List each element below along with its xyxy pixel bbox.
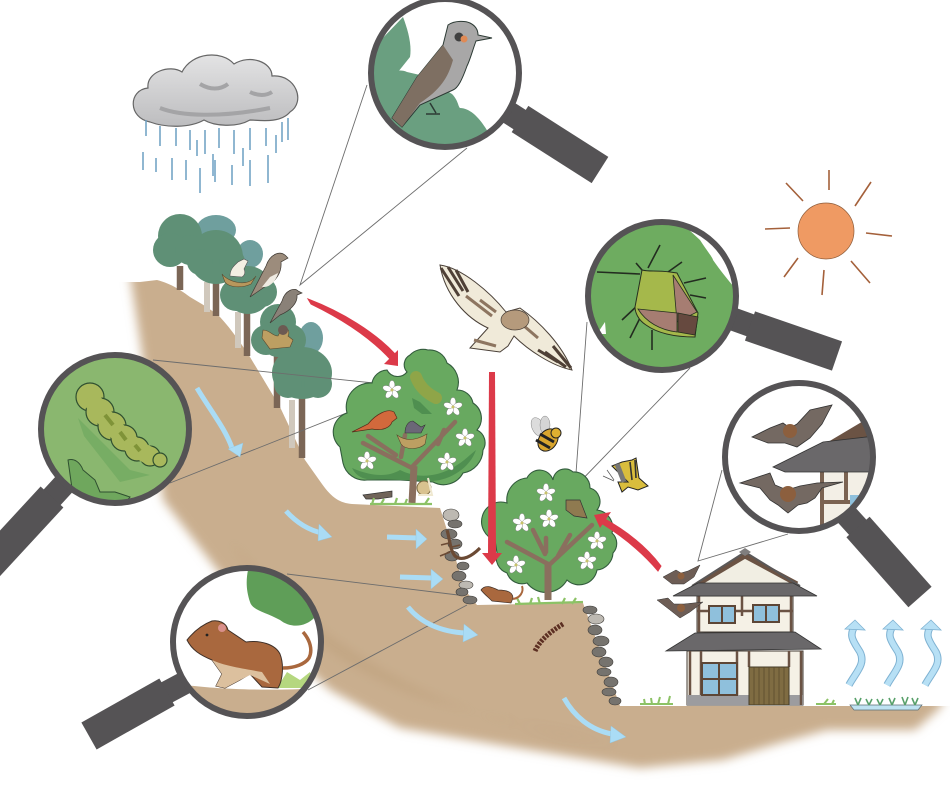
red arrows: [308, 299, 661, 571]
trees on hilltop: [153, 214, 332, 458]
windows: [709, 606, 735, 623]
sun: [765, 170, 892, 295]
magnifier: stink bug: [588, 215, 837, 370]
house with bats: [640, 548, 836, 705]
small animals: lizard, vole, centipede: [440, 530, 563, 651]
magnifier: caterpillar: [0, 355, 189, 575]
magnifier: rodent: [89, 560, 322, 736]
caterpillar on leaf: [416, 377, 436, 398]
magnifier: bird: [370, 0, 600, 170]
stone walls: [441, 509, 621, 705]
magnifier connector lines: [153, 85, 788, 690]
stink bug on tree: [566, 500, 587, 518]
tree with flowers (left): [333, 349, 485, 504]
magnifier: bats: [725, 383, 920, 597]
red bird: [352, 411, 397, 432]
door: [749, 667, 789, 705]
cloud with rain: [133, 55, 298, 193]
small bats: [663, 565, 700, 584]
rice paddy: [850, 697, 922, 710]
upper wall: [697, 596, 793, 632]
gable: [698, 555, 797, 583]
lower wall: [687, 651, 803, 705]
blue water arrows: [197, 388, 626, 743]
snail: [417, 481, 431, 495]
hillside soil: [128, 262, 945, 768]
nest and chick: [397, 434, 427, 448]
grass: [370, 498, 432, 504]
grass patches: [640, 696, 836, 704]
lower roof: [666, 632, 821, 651]
bee and butterfly: [528, 415, 648, 492]
hawk: [440, 265, 572, 370]
upper roof: [673, 583, 817, 596]
nests and birds in the hilltop trees: [222, 253, 302, 349]
tree with flowers (right): [482, 469, 617, 604]
grasshopper: [363, 491, 392, 499]
vapor arrows: [845, 620, 941, 685]
grass: [515, 597, 583, 604]
